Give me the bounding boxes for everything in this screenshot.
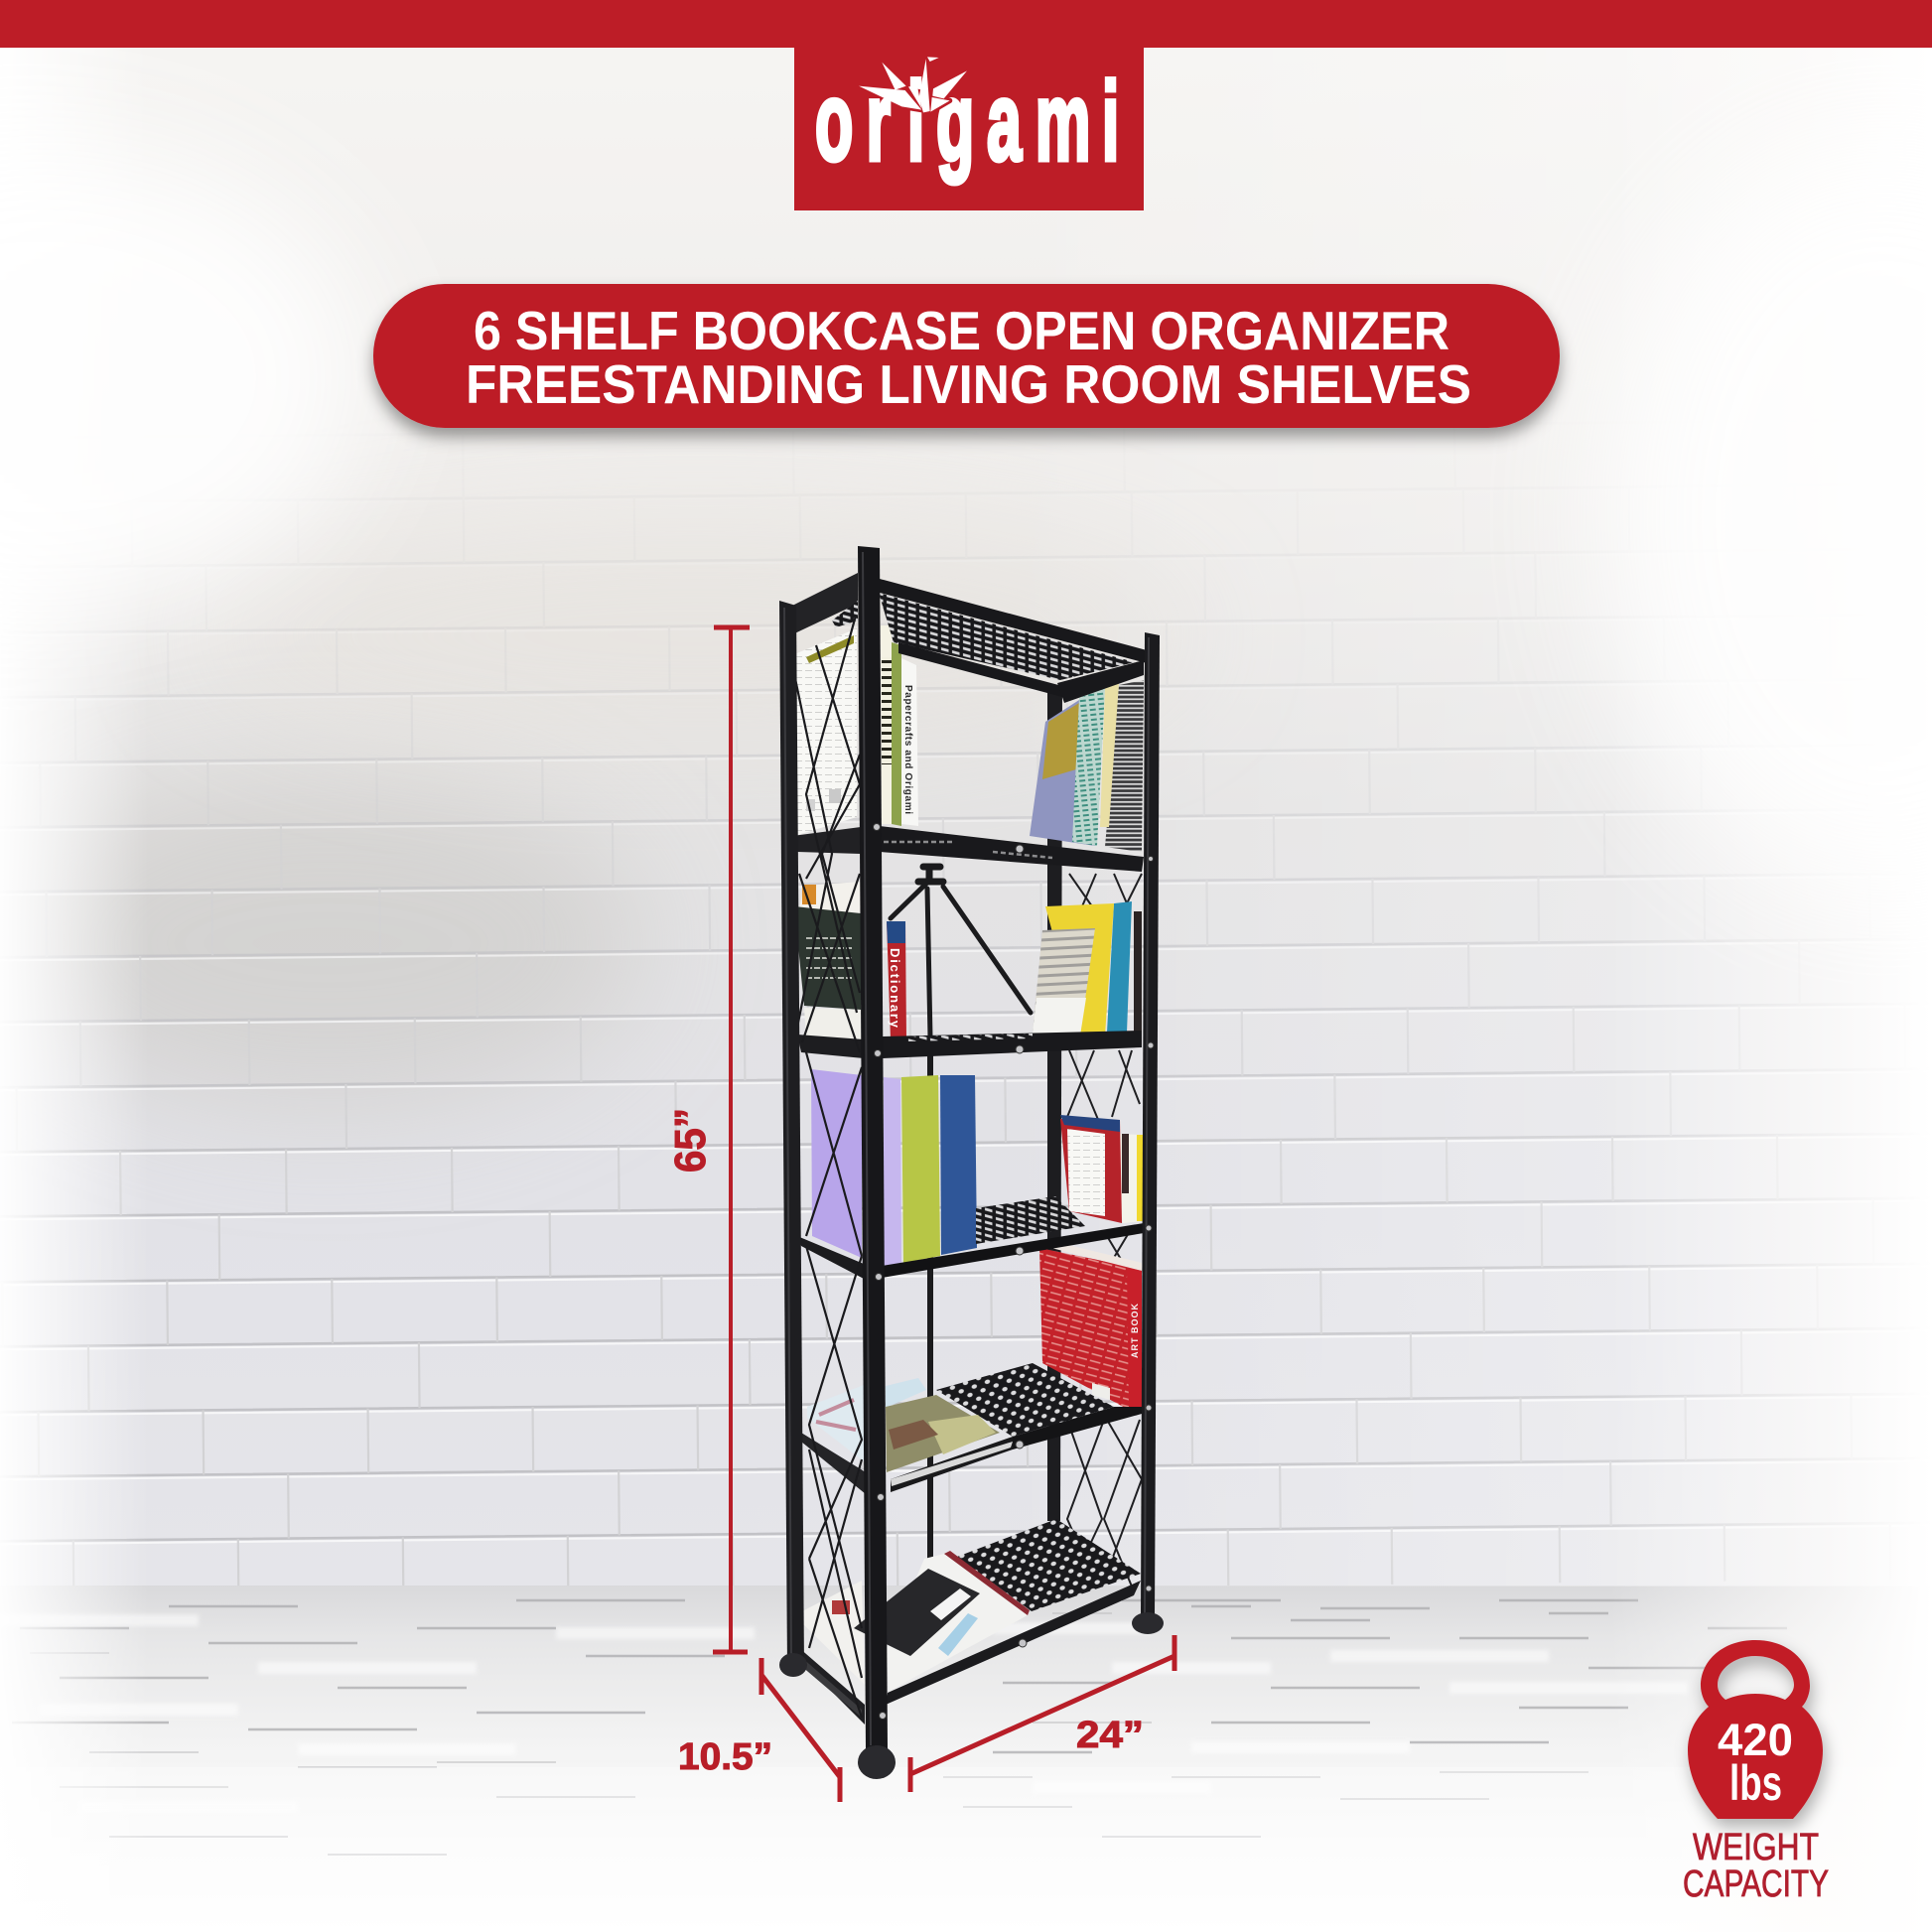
shelf 6 (791, 1519, 1141, 1725)
shelf 5 (801, 1363, 1142, 1494)
screws (874, 824, 1154, 1720)
books bay 1 right (1030, 680, 1144, 852)
title text: 6 SHELF BOOKCASE OPEN ORGANIZER (474, 300, 1449, 361)
books bay 3 binders (811, 1069, 977, 1266)
label 65 inches: 65” (666, 1108, 715, 1173)
shelf 3 (797, 1031, 1142, 1058)
weight capacity badge: lbs (1729, 1755, 1782, 1811)
dimension: width 24 (910, 1635, 1174, 1792)
magazines (807, 1378, 1013, 1486)
logo: origami (794, 47, 1144, 210)
capacity value: 420 (1718, 1715, 1793, 1765)
icon: kettlebell (1688, 1640, 1823, 1819)
label 24 inches: 24” (1076, 1715, 1144, 1756)
top red band (0, 0, 1932, 48)
books bay 2 right (1033, 901, 1142, 1035)
right front post (1141, 632, 1160, 1618)
title pill: FREESTANDING LIVING ROOM SHELVES (466, 353, 1471, 415)
books bay 3 dictionary (1060, 1115, 1144, 1223)
rear structure and tripod (891, 690, 1062, 1559)
books bottom shelf (802, 1551, 1030, 1691)
right side wire bracing (1065, 874, 1142, 1587)
shelf 1 top perforated (782, 573, 1147, 703)
left side wire bracing (789, 616, 862, 1718)
feet (779, 1612, 1164, 1779)
center front post (858, 546, 888, 1749)
left rear post (779, 601, 804, 1668)
books bay 1 left (787, 625, 918, 836)
art book spine text: ART BOOK (1130, 1303, 1140, 1358)
label 10.5 inches: 10.5” (678, 1736, 772, 1778)
weight capacity badge (1683, 1640, 1829, 1905)
weight capacity badge: CAPACITY (1683, 1863, 1829, 1905)
dimension: height 65 (666, 627, 750, 1652)
books bay 2 left (794, 882, 906, 1039)
shelf 4 (797, 1196, 1144, 1279)
art book (1039, 1241, 1142, 1410)
dimension: depth 10.5 (678, 1658, 840, 1802)
logo wordmark: origami (815, 61, 1119, 185)
post highlight (784, 552, 1149, 1745)
capacity caption: WEIGHT (1693, 1827, 1819, 1868)
icon: paper crane (859, 57, 967, 112)
shelf 2 (792, 826, 1144, 872)
book spine text: Papercrafts and Origami (902, 685, 913, 814)
dictionary spine text: Dictionary (888, 948, 902, 1029)
title pill (373, 284, 1560, 428)
bookcase product (779, 546, 1164, 1779)
